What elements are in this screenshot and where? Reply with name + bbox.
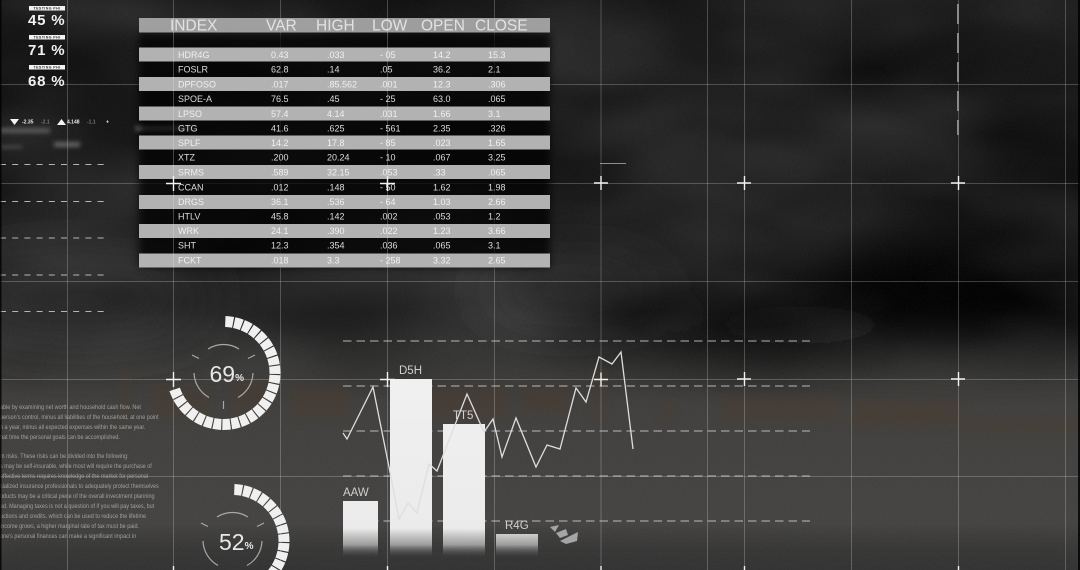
row GTG: 2.35	[433, 124, 451, 134]
row FOSLR: .14	[327, 64, 340, 74]
row FOSLR: 36.2	[433, 64, 451, 74]
row SRMS: .33	[433, 168, 446, 178]
stat: 45 percent: 45 %	[28, 12, 65, 29]
text block: personal finance paragraphs: m risks. These risks can be divided into the following:	[0, 454, 129, 460]
row LPSO: LPSO	[178, 109, 202, 119]
table header row: CLOSE	[475, 18, 528, 34]
stat: 71 percent: TESTING PHI	[34, 36, 60, 40]
text block: personal finance paragraphs: ed. Managing taxes is not a question of if you will pay taxes, but	[0, 504, 155, 510]
gauge: 52 percent	[179, 488, 286, 570]
crosshair markers	[166, 176, 965, 570]
row DPFOSO: .001	[380, 80, 398, 90]
row DPFOSO: .85.562	[327, 80, 357, 90]
row CCAN: 1.62	[433, 182, 451, 192]
text block: personal finance paragraphs: cialized insurance professionals to adequately protect themselves	[0, 484, 159, 490]
row HDR4G: HDR4G	[178, 50, 210, 60]
gauge value: %	[245, 541, 254, 552]
row FCKT: 3.3	[327, 256, 340, 266]
row DPFOSO: .017	[271, 80, 289, 90]
row LPSO: 57.4	[271, 109, 289, 119]
row DPFOSO: DPFOSO	[178, 80, 216, 90]
stat: 71 percent: 71 %	[28, 42, 65, 59]
row HDR4G: - 05	[380, 50, 396, 60]
row GTG: 41.6	[271, 124, 289, 134]
row FOSLR: 2.1	[488, 64, 501, 74]
row FCKT: 3.32	[433, 256, 451, 266]
row HTLV: 1.2	[488, 212, 501, 222]
row FCKT: 2.65	[488, 256, 506, 266]
table header row: VAR	[266, 18, 297, 34]
table striped rows	[139, 48, 550, 268]
gauge value: 52	[219, 529, 245, 555]
text block: personal finance paragraphs: oducts may be a critical piece of the overall investment planning	[0, 494, 155, 500]
gauge inner dial	[192, 345, 255, 409]
line series	[343, 352, 633, 519]
bar: D5H: D5H	[399, 365, 422, 377]
row XTZ: XTZ	[178, 152, 196, 162]
row XTZ: .067	[433, 152, 451, 162]
smudge near R4G	[550, 525, 578, 544]
stat: 68 percent: TESTING PHI	[34, 66, 60, 70]
row DRGS: .536	[327, 197, 345, 207]
bar: TT5	[443, 410, 485, 557]
row FCKT: FCKT	[178, 256, 202, 266]
row SRMS: .589	[271, 168, 289, 178]
row LPSO: 3.1	[488, 109, 501, 119]
row SPOE-A: .45	[327, 94, 340, 104]
stat: testing percentages	[28, 6, 65, 90]
row XTZ: .200	[271, 152, 289, 162]
bar: D5H	[390, 365, 432, 557]
row SPLF: .023	[433, 138, 451, 148]
row SPLF: 1.65	[488, 138, 506, 148]
text block: personal finance paragraphs: able by examining net worth and household cash flow. Net	[0, 405, 141, 411]
row WRK: .390	[327, 226, 345, 236]
row SHT: 3.1	[488, 240, 501, 250]
row HDR4G: 14.2	[433, 50, 451, 60]
gauge ring segments	[179, 488, 286, 570]
row GTG: .625	[327, 124, 345, 134]
row DRGS: DRGS	[178, 197, 204, 207]
row DRGS: 2.66	[488, 197, 506, 207]
table header row: OPEN	[421, 18, 465, 34]
text block: personal finance paragraphs: income grows, a higher marginal rate of tax must be paid.	[0, 524, 139, 530]
row DPFOSO: 12.3	[433, 80, 451, 90]
vertical dashed marker	[957, 4, 959, 135]
row HTLV: HTLV	[178, 212, 200, 222]
row CCAN: CCAN	[178, 182, 204, 192]
table header row: INDEX	[170, 18, 218, 34]
stat: 45 percent: TESTING PHI	[34, 7, 60, 11]
row GTG: GTG	[178, 124, 198, 134]
row SHT: .036	[380, 240, 398, 250]
ticker strip: 4.148	[67, 120, 80, 126]
row SPOE-A: 63.0	[433, 94, 451, 104]
table header row: LOW	[372, 18, 408, 34]
streak highlight	[600, 163, 626, 164]
row SPLF: 17.8	[327, 138, 345, 148]
text block: personal finance paragraphs: effective terms requires knowledge of the market for personal	[0, 474, 148, 480]
row FOSLR: 62.8	[271, 64, 289, 74]
row SPLF: SPLF	[178, 138, 201, 148]
gauge value: %	[235, 373, 244, 384]
row WRK: .022	[380, 226, 398, 236]
ticker strip: -2.1	[41, 120, 50, 126]
row SPLF: 14.2	[271, 138, 289, 148]
row WRK: 24.1	[271, 226, 289, 236]
table grid overlay	[174, 18, 388, 268]
row SPOE-A: SPOE-A	[178, 94, 212, 104]
gauge ring segments	[170, 320, 277, 426]
row HTLV: .053	[433, 212, 451, 222]
table header row	[139, 18, 550, 34]
text block: personal finance paragraphs: hat time the personal goals can be accomplished.	[0, 435, 120, 441]
stat: 68 percent: 68 %	[28, 73, 65, 90]
row DRGS: - 64	[380, 197, 396, 207]
row CCAN: .012	[271, 182, 289, 192]
text block: personal finance paragraphs: s may be self-insurable, while most will require the purchase of	[0, 464, 152, 470]
row SPOE-A: .065	[488, 94, 506, 104]
text block: personal finance paragraphs: n a year, minus all expected expenses within the same year.	[0, 425, 146, 431]
row XTZ: - 10	[380, 152, 396, 162]
gauge: 69 percent	[170, 320, 277, 426]
row LPSO: .031	[380, 109, 398, 119]
row WRK: 3.66	[488, 226, 506, 236]
row WRK: 1.23	[433, 226, 451, 236]
bar: R4G	[496, 520, 538, 557]
row FCKT: .018	[271, 256, 289, 266]
table values	[178, 50, 506, 266]
row DPFOSO: .306	[488, 80, 506, 90]
stat: 68 percent	[28, 65, 65, 90]
row DRGS: 1.03	[433, 197, 451, 207]
bar: AAW: AAW	[343, 487, 369, 499]
row SRMS: .053	[380, 168, 398, 178]
row HTLV: .142	[327, 212, 345, 222]
row CCAN: 1.98	[488, 182, 506, 192]
background: blurred city skyline	[120, 368, 1080, 432]
row SRMS: SRMS	[178, 168, 204, 178]
row HTLV: 45.8	[271, 212, 289, 222]
row SHT: 12.3	[271, 240, 289, 250]
row XTZ: 3.25	[488, 152, 506, 162]
table header row: HIGH	[316, 18, 355, 34]
row FOSLR: FOSLR	[178, 64, 209, 74]
bar: AAW	[343, 487, 378, 557]
row SPOE-A: 76.5	[271, 94, 289, 104]
row LPSO: 4.14	[327, 109, 345, 119]
row GTG: - 561	[380, 124, 401, 134]
left dashed guide lines	[0, 164, 106, 312]
chart: bars and line	[343, 341, 810, 557]
ticker strip	[10, 119, 109, 126]
row WRK: WRK	[178, 226, 199, 236]
row CCAN: - 50	[380, 182, 396, 192]
row CCAN: .148	[327, 182, 345, 192]
text block: personal finance paragraphs: person's control, minus all liabilities of the household, at one point	[0, 415, 159, 421]
ticker strip: -2.35	[22, 120, 34, 126]
text block: personal finance paragraphs: uctions and credits, which can be used to reduce the lifetime	[0, 514, 147, 520]
row HDR4G: 15.3	[488, 50, 506, 60]
row SHT: SHT	[178, 240, 197, 250]
row SPLF: - 85	[380, 138, 396, 148]
row HDR4G: .033	[327, 50, 345, 60]
chart dashed gridlines	[343, 341, 810, 521]
row XTZ: 20.24	[327, 152, 350, 162]
row SPOE-A: - 25	[380, 94, 396, 104]
row FCKT: - 258	[380, 256, 401, 266]
row SHT: .065	[433, 240, 451, 250]
bar: R4G: R4G	[505, 520, 529, 532]
row SRMS: 32.15	[327, 168, 350, 178]
row LPSO: 1.66	[433, 109, 451, 119]
table backing	[139, 33, 550, 267]
ticker strip: +	[106, 120, 109, 126]
table: stock index data	[139, 18, 550, 268]
ticker strip: -1.1	[87, 120, 96, 126]
row SHT: .354	[327, 240, 345, 250]
gauge inner dial	[201, 513, 264, 566]
text block: personal finance paragraphs	[0, 405, 159, 540]
row HTLV: .002	[380, 212, 398, 222]
row HDR4G: 0.43	[271, 50, 289, 60]
bar: TT5: TT5	[453, 410, 473, 422]
wispy highlights	[0, 126, 196, 148]
row FOSLR: .05	[380, 64, 393, 74]
text block: personal finance paragraphs: one's personal finances can make a significant impact in	[0, 534, 136, 540]
row SRMS: .065	[488, 168, 506, 178]
gauge value: 69	[210, 361, 235, 387]
row GTG: .326	[488, 124, 506, 134]
row DRGS: 36.1	[271, 197, 289, 207]
